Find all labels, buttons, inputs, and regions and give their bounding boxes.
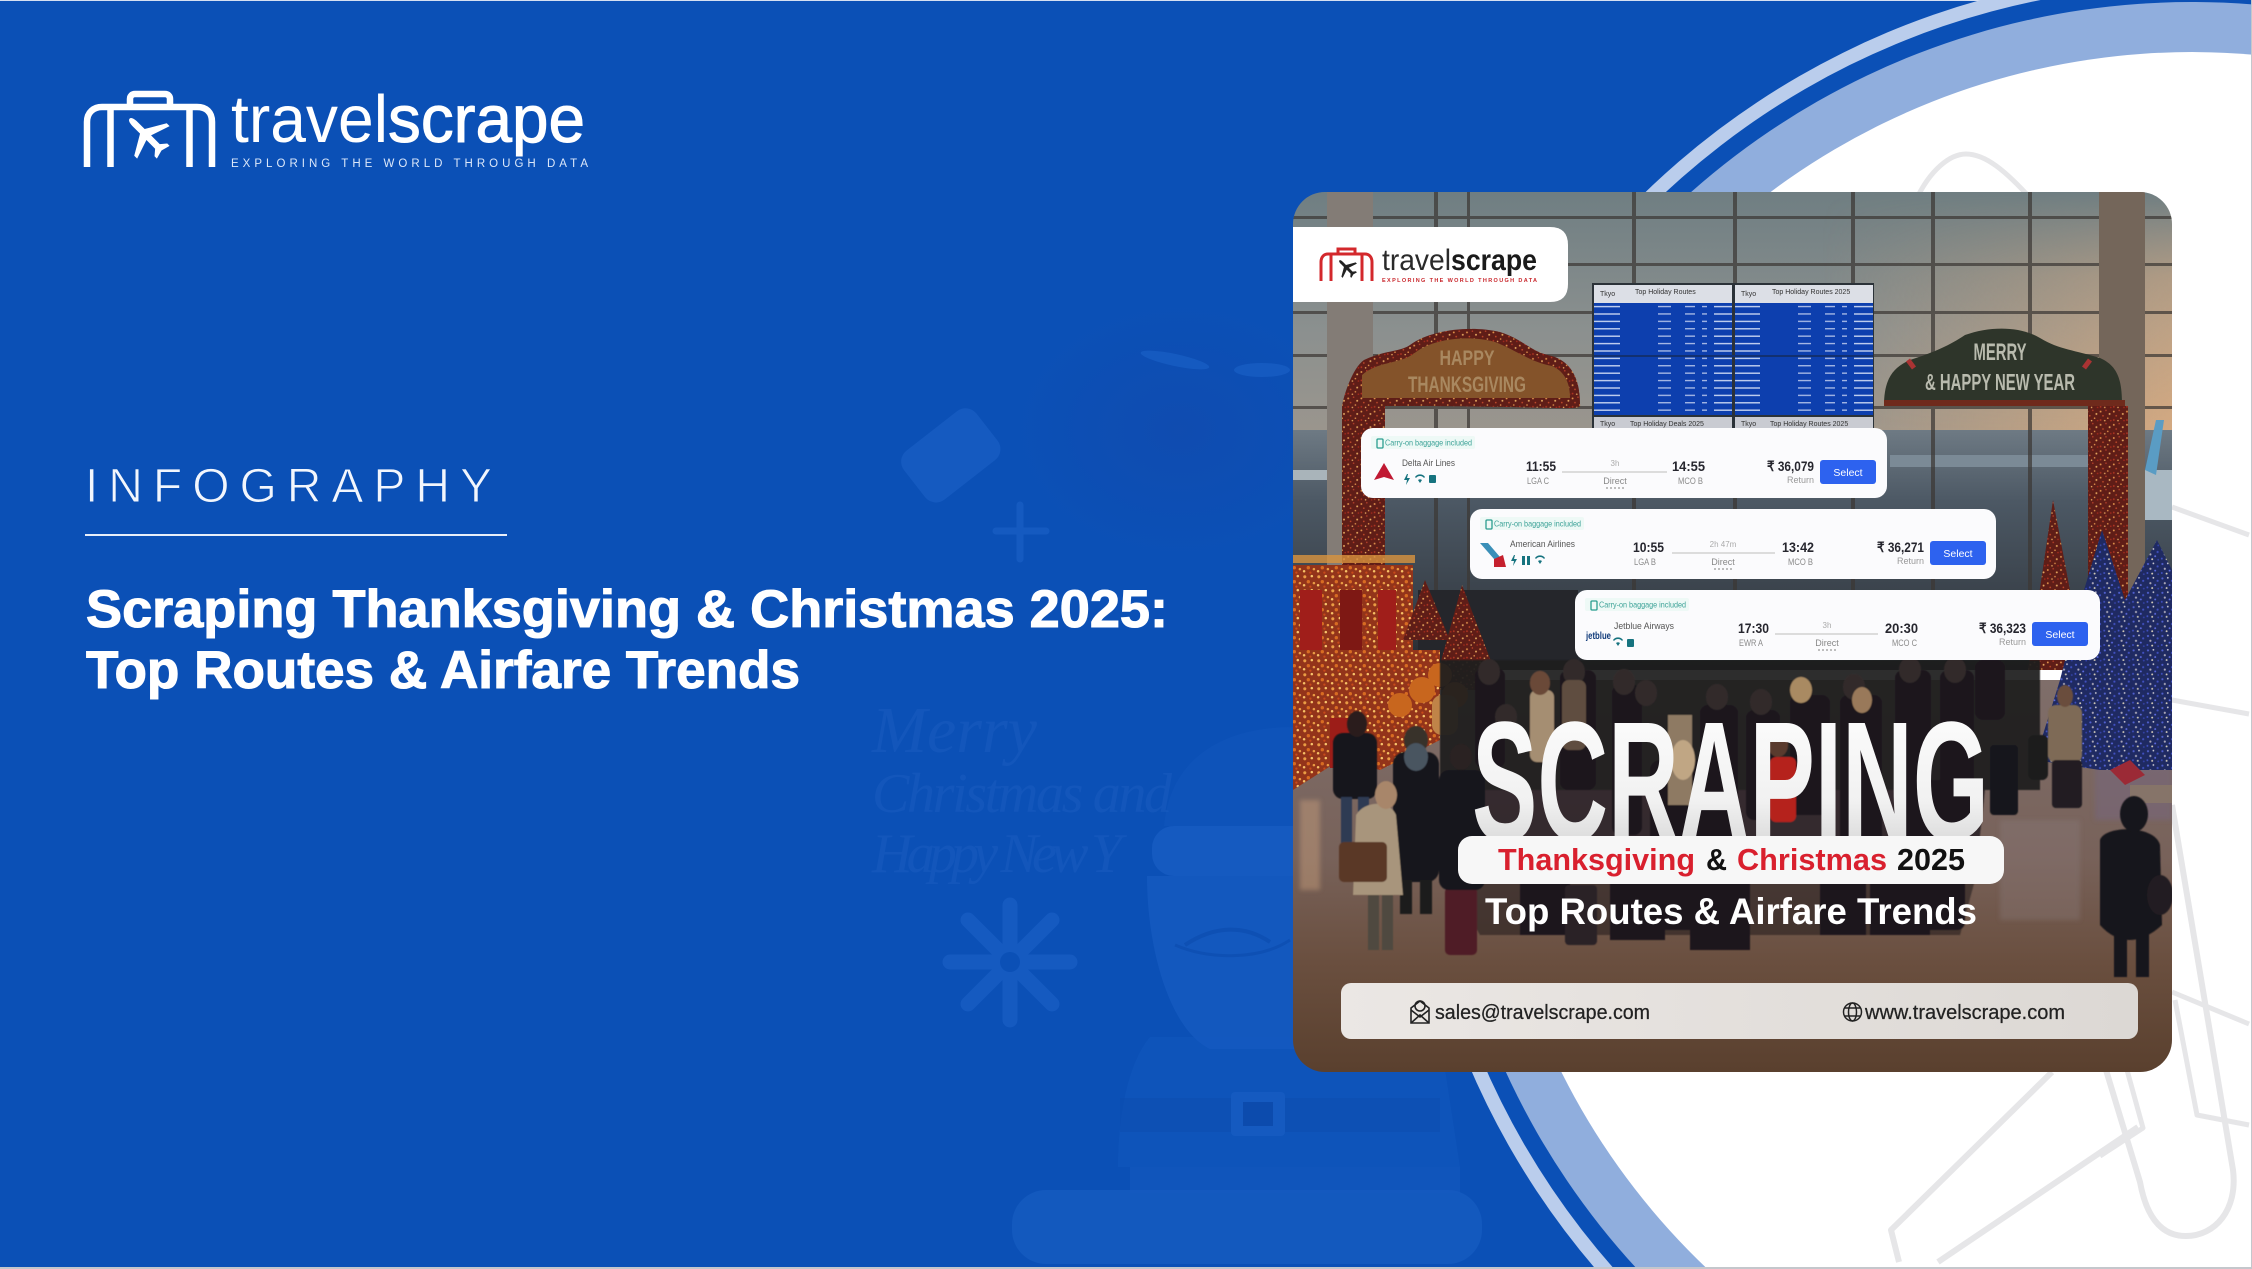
poster subtitle pill [1458, 836, 2004, 884]
photo: floor [1293, 680, 2172, 1072]
label: INFOGRAPHY: INFOGRAPHY [85, 460, 492, 513]
logo: travelscrape white [87, 82, 588, 170]
photo: right blue christmas trees [2028, 500, 2172, 803]
photo: crowd [1333, 657, 2173, 977]
flight card: American Airlines: 2h 47m [1710, 540, 1737, 549]
flight card: American Airlines: Carry-on baggage included [1494, 518, 1581, 528]
flight card: Delta: Return [1787, 475, 1814, 485]
flight card: American Airlines: Select [1943, 548, 1973, 560]
photo: departures screens: Tkyo [1741, 421, 1756, 428]
flight card: Jetblue: Direct [1815, 638, 1839, 648]
poster subtitle: routes: Top Routes & Airfare Trends [1485, 891, 1977, 932]
poster subtitle pill: 2025 [1897, 842, 1965, 877]
ghost: holiday illustration behind the text: Happy New Y [871, 823, 1128, 885]
flight card: Delta: LGA C [1527, 476, 1549, 486]
icon: email [1411, 1001, 1429, 1023]
photo: departures screens: Top Holiday Deals 2025 [1630, 421, 1704, 428]
flight card: American Airlines: 10:55 [1633, 539, 1664, 555]
photo: happy thanksgiving arch [1342, 328, 1580, 565]
icon: globe [1844, 1003, 1862, 1021]
flight card: American Airlines [1470, 509, 1996, 579]
wordmark: scrape [388, 82, 585, 157]
flight card: Jetblue: jetblue [1585, 631, 1611, 642]
divider under label [85, 534, 507, 536]
poster contact bar: sales@travelscrape.com [1435, 1002, 1650, 1024]
photo: departures screens [1592, 283, 1874, 429]
photo: happy thanksgiving arch: HAPPY [1440, 347, 1494, 370]
flight card: American Airlines: ₹ 36,271 [1877, 539, 1924, 555]
flight card: Jetblue: EWR A [1739, 638, 1763, 648]
flight card: Jetblue [1575, 590, 2100, 660]
flight card: Delta: 3h [1611, 459, 1619, 468]
flight card: American Airlines: MCO B [1788, 557, 1813, 567]
tagline: EXPLORING THE WORLD THROUGH DATA [231, 158, 588, 170]
photo: left market stall with lights [1293, 555, 1578, 790]
flight card: Jetblue: Carry-on baggage included [1599, 600, 1686, 610]
flight card: Jetblue: 17:30 [1738, 620, 1769, 636]
wordmark [231, 82, 585, 157]
icon: red suitcase [1321, 249, 1372, 282]
flight card: American Airlines: Direct [1711, 557, 1735, 567]
flight card: Delta: Select [1833, 467, 1863, 479]
photo: departures screens: Tkyo [1600, 291, 1615, 298]
flight card: Jetblue: ₹ 36,323 [1979, 620, 2026, 636]
ghost airplane outline on white [1891, 154, 2249, 1262]
ghost: holiday illustration behind the text [871, 347, 1482, 1264]
poster subtitle pill: Christmas [1737, 842, 1887, 877]
flight card: Jetblue: 20:30 [1885, 620, 1918, 636]
flight card: Jetblue: MCO C [1892, 638, 1917, 648]
photo: happy thanksgiving arch: THANKSGIVING [1408, 372, 1526, 397]
photo: window wall and sky [1293, 192, 2172, 672]
flight card: American Airlines: American Airlines [1510, 539, 1575, 550]
flight card: Jetblue: Return [1999, 637, 2026, 647]
photo: departures screens: Top Holiday Routes [1635, 289, 1696, 296]
photo: merry new year arch: MERRY [1974, 339, 2026, 366]
poster subtitle pill: & [1706, 842, 1727, 877]
icon: suitcase with plane [87, 94, 212, 168]
poster logo chip [1293, 227, 1568, 302]
wordmark: travel [231, 82, 388, 157]
ghost: holiday illustration behind the text: Christmas and [872, 763, 1173, 825]
flight card: Delta: ₹ 36,079 [1767, 458, 1814, 474]
flight card: Delta: Carry-on baggage included [1385, 438, 1472, 448]
flight card: American Airlines: LGA B [1634, 557, 1656, 567]
photo: merry new year arch [1884, 328, 2128, 600]
photo: departures screens: Top Holiday Routes 2025 [1770, 421, 1848, 428]
flight card: Delta: Delta Air Lines [1402, 458, 1455, 469]
flight card: Delta: MCO B [1678, 476, 1703, 486]
flight card: Delta: 11:55 [1526, 458, 1556, 474]
flight card: Delta: 14:55 [1672, 458, 1705, 474]
ghost: holiday illustration behind the text: Merry [871, 694, 1038, 767]
title [86, 580, 1168, 700]
photo: reflections [1300, 760, 2172, 920]
poster contact bar [1341, 983, 2138, 1039]
flight card: American Airlines: 13:42 [1782, 539, 1814, 555]
title: Scraping Thanksgiving & Christmas 2025: [86, 580, 1168, 639]
poster contact bar: www.travelscrape.com [1864, 1002, 2065, 1024]
panel: airport photo poster [1293, 192, 2173, 1072]
flight card: Jetblue: Jetblue Airways [1614, 621, 1674, 632]
decorative concentric arcs [1406, 0, 2252, 1269]
photo: departures screens: Top Holiday Routes 2025 [1772, 289, 1850, 296]
poster wordmark: travel [1382, 244, 1451, 277]
photo: merry new year arch: & HAPPY NEW YEAR [1925, 369, 2075, 395]
title: Top Routes & Airfare Trends [86, 641, 800, 700]
photo: departures screens: Tkyo [1600, 421, 1615, 428]
poster subtitle pill: Thanksgiving [1498, 842, 1695, 877]
flight card: Jetblue: Select [2045, 629, 2075, 641]
poster logo chip: EXPLORING THE WORLD THROUGH DATA [1382, 278, 1537, 284]
flight card: American Airlines: Return [1897, 556, 1924, 566]
flight card: Jetblue: 3h [1823, 621, 1831, 630]
flight card: Delta: Direct [1603, 476, 1627, 486]
poster logo chip: scrape [1451, 244, 1537, 277]
photo: departures screens: Tkyo [1741, 291, 1756, 298]
flight card: Delta [1361, 428, 1887, 498]
